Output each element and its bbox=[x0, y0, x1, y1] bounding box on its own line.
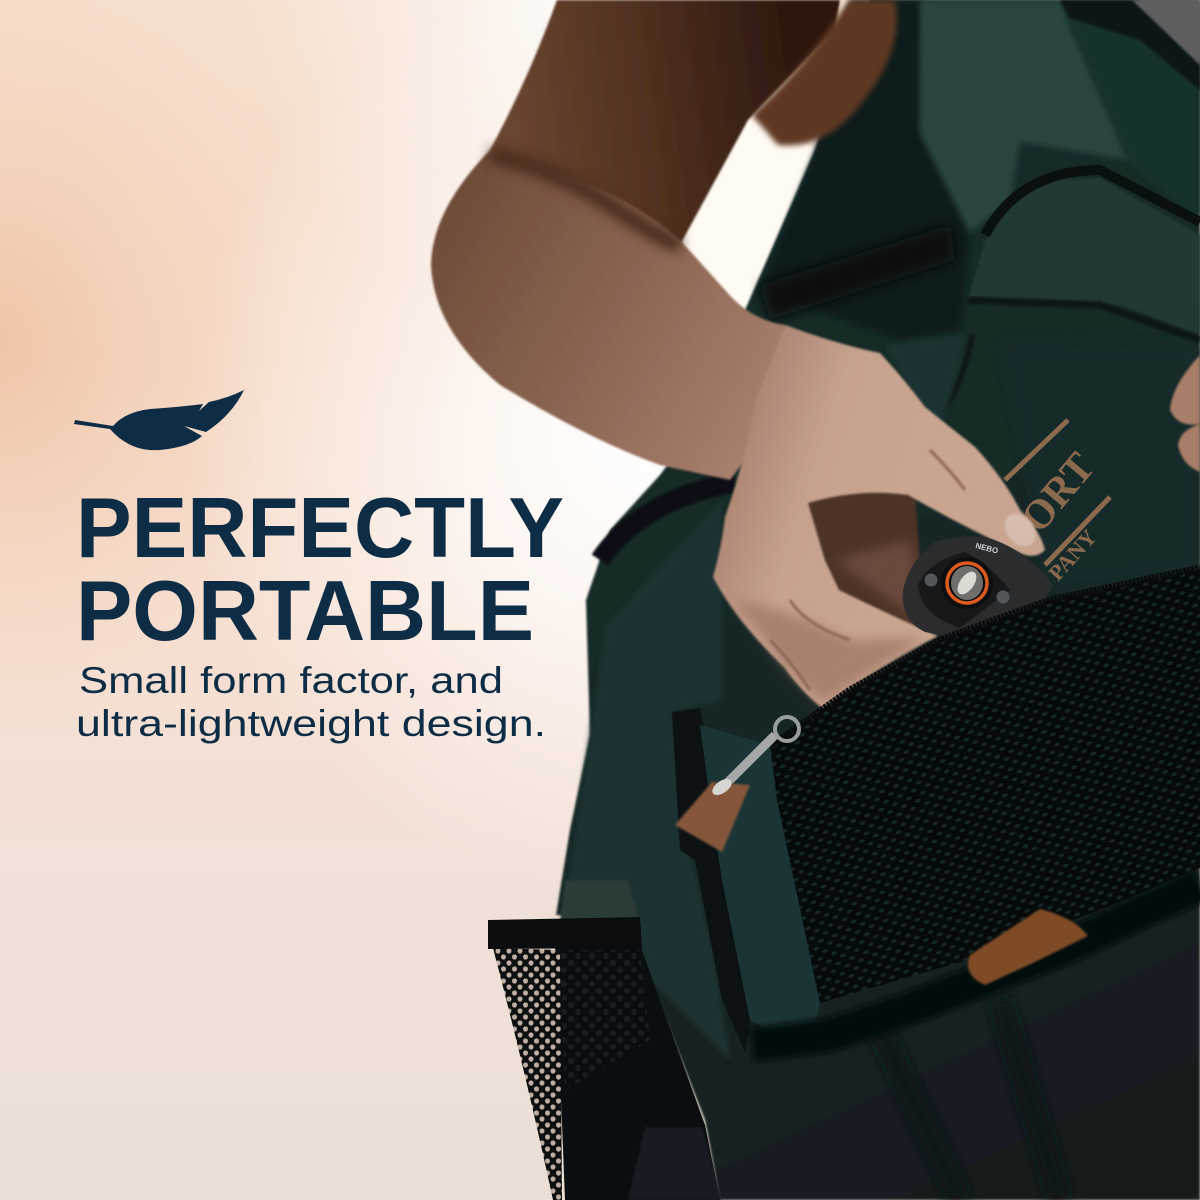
knuckle creases bbox=[770, 450, 965, 690]
shaded centre band bbox=[760, 225, 955, 320]
seam below pocket bbox=[968, 300, 1200, 340]
flashlight body bbox=[903, 537, 1053, 638]
metal pull bbox=[720, 735, 775, 790]
pocket lower green patch bbox=[628, 1127, 722, 1200]
top zipper bbox=[985, 170, 1200, 235]
flashlight lens bbox=[941, 557, 993, 609]
right body panel bbox=[1000, 340, 1200, 590]
soft crease between upper arm and forearm bbox=[490, 155, 680, 246]
pocket top band bbox=[488, 917, 642, 949]
lower left fold bbox=[565, 500, 730, 1060]
ribbed binding left strip bbox=[672, 708, 750, 1052]
upper arm bbox=[490, 0, 840, 260]
leather patch at shoulder bbox=[752, 0, 897, 146]
flashlight brand: NEBO bbox=[975, 541, 999, 556]
pocket binding shadow bbox=[752, 885, 1200, 1045]
lower pack shadow seams bbox=[880, 1000, 1060, 1200]
zipper pull with leather tab bbox=[675, 717, 799, 852]
shoulder shadow column bbox=[760, 0, 970, 340]
shirt at top right bbox=[1132, 0, 1200, 65]
body copy bbox=[76, 660, 546, 744]
pocket dark body bbox=[555, 945, 720, 1200]
fingers at right edge bbox=[1170, 355, 1200, 472]
pocket mesh bbox=[770, 568, 1200, 1003]
embroidered backpack logo: ORT bbox=[1012, 444, 1104, 541]
pocket zipper bbox=[772, 568, 1200, 745]
leather tab bbox=[675, 782, 750, 852]
pocket shaded mesh bbox=[560, 950, 650, 1090]
pocket grey side above band bbox=[560, 880, 640, 922]
side mesh bottle pocket bbox=[488, 880, 722, 1200]
thumb nail bbox=[998, 508, 1042, 552]
hand and thumb bbox=[713, 325, 1045, 708]
upper left dark seam band bbox=[600, 482, 735, 560]
headline: PERFECTLY bbox=[76, 481, 564, 576]
palm shadow gap bbox=[800, 490, 925, 640]
mesh pocket panel bbox=[672, 568, 1200, 1052]
lit upper flap bbox=[920, 0, 1130, 233]
embroidered backpack logo bbox=[1005, 420, 1110, 585]
pocket green side flap bbox=[700, 725, 820, 1036]
hand bbox=[713, 325, 1045, 708]
backpack body bbox=[556, 0, 1200, 1200]
headline bbox=[76, 481, 564, 659]
flashlight bbox=[903, 537, 1053, 638]
bright sky gap between arm and backpack bbox=[675, 118, 820, 318]
dark shoulder wedge bbox=[1060, 0, 1200, 90]
embroidered backpack logo: PANY bbox=[1043, 524, 1102, 585]
body copy: Small form factor, and bbox=[79, 660, 503, 701]
flashlight screws bbox=[924, 574, 938, 586]
centre lower panel bbox=[885, 335, 965, 420]
upper right panel bbox=[1065, 15, 1200, 220]
feather icon bbox=[74, 390, 244, 450]
pocket lit mesh bbox=[493, 948, 562, 1200]
headline: PORTABLE bbox=[76, 564, 534, 659]
lower finger shading bbox=[735, 600, 925, 704]
body copy: ultra-lightweight design. bbox=[76, 703, 546, 744]
leather strap tab bbox=[968, 909, 1088, 985]
top zipper pocket flap bbox=[968, 178, 1200, 335]
forearm bbox=[431, 150, 790, 480]
